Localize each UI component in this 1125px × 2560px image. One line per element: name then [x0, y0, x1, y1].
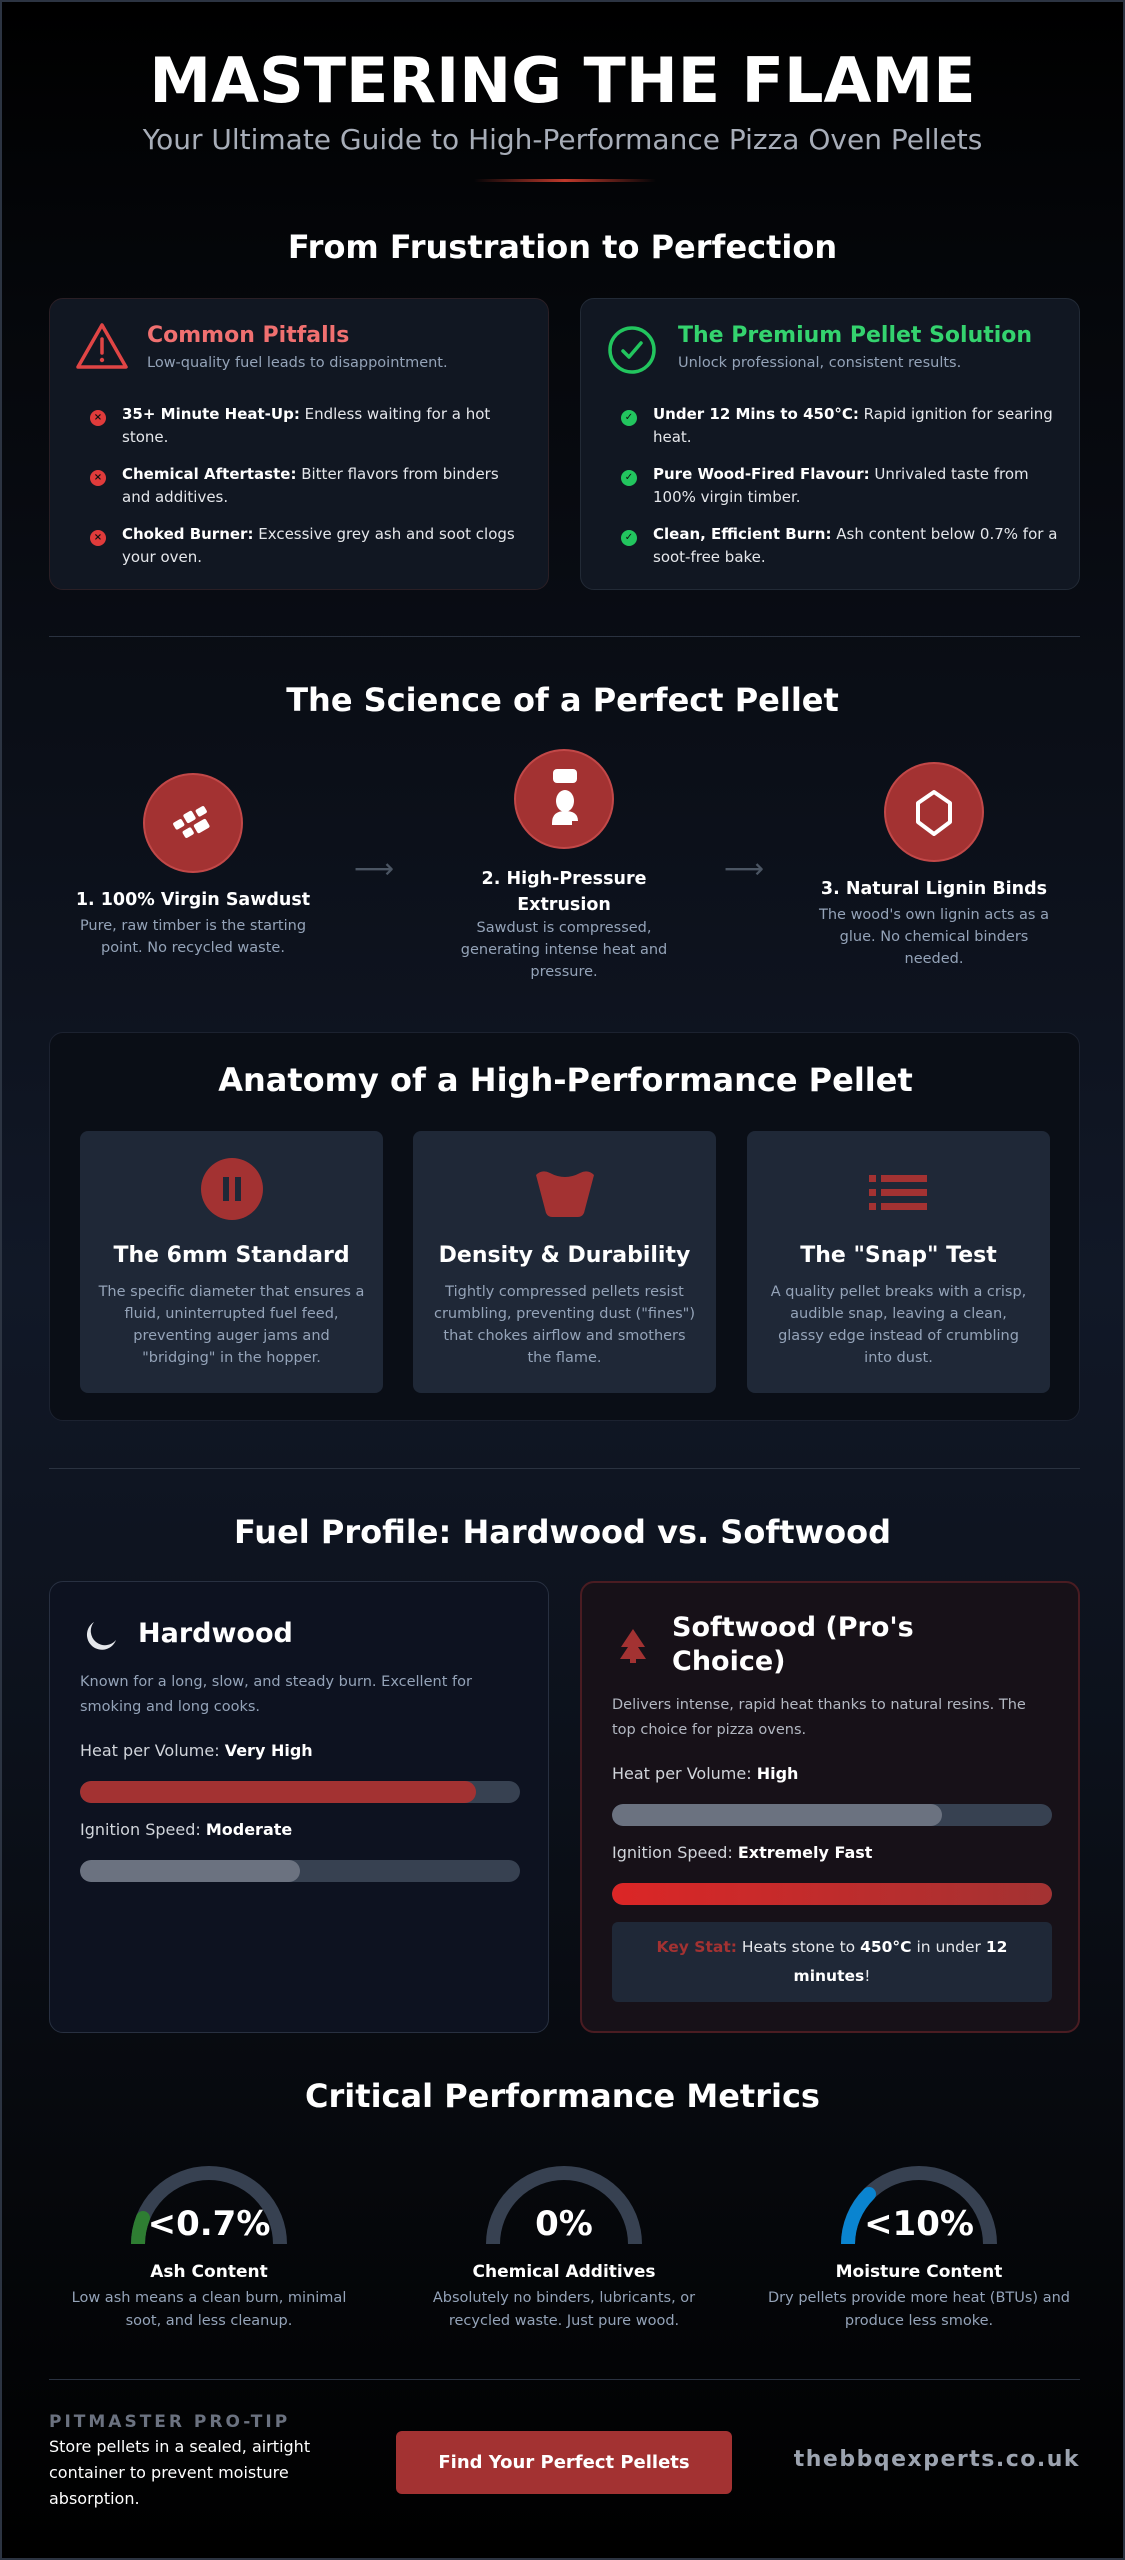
panel: premium solution: ✓ — [625, 412, 633, 423]
button — [396, 2431, 732, 2494]
heading — [672, 1612, 914, 1677]
metric: moisture — [768, 2166, 1070, 2329]
panel: premium solution — [580, 298, 1080, 590]
icon: bowl — [536, 1171, 594, 1217]
step text: Sawdust is compressed, generating intense heat and pressure. — [461, 920, 667, 980]
desc: Absolutely no binders, lubricants, or recycled waste. Just pure wood. — [433, 2290, 695, 2329]
heading: Hardwood — [138, 1618, 293, 1649]
label: Chemical Additives — [473, 2262, 655, 2282]
card: snap — [747, 1131, 1050, 1393]
panel: common pitfalls: × — [94, 532, 102, 543]
card: 6mm: The 6mm Standard — [113, 1243, 350, 1268]
arrow: ⟶ — [354, 852, 394, 885]
icon: press — [514, 749, 614, 849]
value: <10% — [864, 2204, 974, 2244]
footer: pro tip: PITMASTER PRO-TIP — [49, 2412, 290, 2432]
arrow: ⟶ — [724, 852, 764, 885]
card: 6mm: The specific diameter that ensures a fluid, uninterrupted fuel feed, preventing auger jams and "bridging" in the hopper. — [99, 1284, 364, 1366]
metric: heat: Heat per Volume: High — [612, 1764, 798, 1783]
card: 6mm — [80, 1131, 383, 1393]
heading: Choice) — [672, 1646, 786, 1677]
desc: Dry pellets provide more heat (BTUs) and produce less smoke. — [768, 2290, 1070, 2329]
panel: common pitfalls — [49, 298, 549, 590]
panel: premium solution: Pure Wood-Fired Flavour: Unrivaled taste from 100% virgin timber. — [653, 465, 1029, 506]
callout: key stat: Key Stat: Heats stone to 450°C in under 12 — [657, 1938, 1007, 1956]
step title: 1. 100% Virgin Sawdust — [76, 890, 310, 910]
gauge — [841, 2166, 997, 2244]
step title — [482, 869, 646, 915]
gauge — [131, 2166, 287, 2244]
panel: premium solution: ✓ — [625, 472, 633, 483]
title: MASTERING THE FLAME — [149, 44, 976, 117]
panel: premium solution: Clean, Efficient Burn: Ash content below 0.7% for a soot-free bake. — [653, 525, 1057, 566]
card: density: Tightly compressed pellets resist crumbling, preventing dust ("fines") that chokes airflow and smothers the flame. — [434, 1284, 695, 1366]
value: 0% — [535, 2204, 593, 2244]
step title: 3. Natural Lignin Binds — [821, 879, 1047, 899]
panel: premium solution: Under 12 Mins to 450°C: Rapid ignition for searing heat. — [653, 405, 1053, 446]
metric: additives — [433, 2166, 696, 2329]
heading: metrics: Critical Performance Metrics — [305, 2077, 820, 2115]
label: Moisture Content — [836, 2262, 1002, 2282]
icon: sawdust — [143, 773, 243, 873]
step text: The wood's own lignin acts as a glue. No chemical binders needed. — [819, 907, 1049, 967]
description: Delivers intense, rapid heat thanks to natural resins. The top choice for pizza ovens. — [612, 1697, 1026, 1738]
step title: 2. High-Pressure — [482, 869, 646, 889]
card: snap: The "Snap" Test — [800, 1243, 997, 1268]
icon: check circle — [608, 326, 656, 374]
list — [90, 405, 515, 566]
panel: common pitfalls: × — [94, 472, 102, 483]
subtitle: Low-quality fuel leads to disappointment. — [147, 355, 448, 371]
callout: key stat — [612, 1922, 1052, 2002]
callout: key stat: minutes! — [794, 1967, 870, 1985]
metric: ash — [72, 2166, 346, 2329]
heading: Anatomy of a High-Performance Pellet — [218, 1061, 913, 1099]
metric: ignition: Ignition Speed: Moderate — [80, 1820, 292, 1839]
metric: heat: Heat per Volume: Very High — [80, 1741, 313, 1760]
step 1 — [76, 773, 310, 956]
heading: science: The Science of a Perfect Pellet — [286, 681, 839, 719]
card: snap: A quality pellet breaks with a crisp, audible snap, leaving a clean, glassy edge instead of crumbling into dust. — [771, 1284, 1026, 1366]
step title: Extrusion — [517, 895, 611, 915]
panel: anatomy — [49, 1032, 1080, 1421]
step 3 — [818, 762, 1049, 967]
heading: from frustration to perfection: From Frustration to Perfection — [288, 228, 837, 266]
card: density: Density & Durability — [439, 1243, 690, 1268]
icon: shield/house — [884, 762, 984, 862]
button: Find Your Perfect Pellets — [438, 2452, 690, 2473]
heading: fuel profile: Fuel Profile: Hardwood vs. Softwood — [234, 1513, 891, 1551]
label: Ash Content — [150, 2262, 268, 2282]
heading: Common Pitfalls — [147, 323, 349, 348]
description: Known for a long, slow, and steady burn. Excellent for smoking and long cooks. — [80, 1674, 472, 1715]
footer: domain: thebbqexperts.co.uk — [794, 2447, 1080, 2472]
value: <0.7% — [148, 2204, 270, 2244]
step 2 — [461, 749, 667, 980]
heading: The Premium Pellet Solution — [678, 323, 1032, 348]
panel: common pitfalls: 35+ Minute Heat-Up: Endless waiting for a hot stone. — [122, 405, 490, 446]
subtitle: Your Ultimate Guide to High-Performance Pizza Oven Pellets — [143, 123, 982, 156]
panel: hardwood — [49, 1581, 549, 2033]
panel: common pitfalls: × — [94, 412, 102, 423]
panel: premium solution: ✓ — [625, 532, 633, 543]
desc: Low ash means a clean burn, minimal soot, and less cleanup. — [72, 2290, 346, 2329]
list — [621, 405, 1057, 566]
panel: softwood — [580, 1581, 1080, 2033]
icon: moon — [86, 1622, 116, 1650]
card: density — [413, 1131, 716, 1393]
step text: Pure, raw timber is the starting point. No recycled waste. — [80, 918, 306, 956]
icon: warning — [76, 323, 128, 369]
panel: common pitfalls: Choked Burner: Excessive grey ash and soot clogs your oven. — [122, 525, 515, 566]
icon: tree — [620, 1629, 646, 1663]
icon: pause circle — [201, 1158, 263, 1220]
gauge — [486, 2166, 642, 2244]
icon: list — [869, 1175, 927, 1210]
heading: Softwood (Pro's — [672, 1612, 914, 1643]
footer: pro tip: Store pellets in a sealed, airtight container to prevent moisture absorption. — [49, 2437, 310, 2508]
subtitle: Unlock professional, consistent results. — [678, 355, 961, 371]
panel: common pitfalls: Chemical Aftertaste: Bitter flavors from binders and additives. — [122, 465, 499, 506]
metric: ignition: Ignition Speed: Extremely Fast — [612, 1843, 872, 1862]
